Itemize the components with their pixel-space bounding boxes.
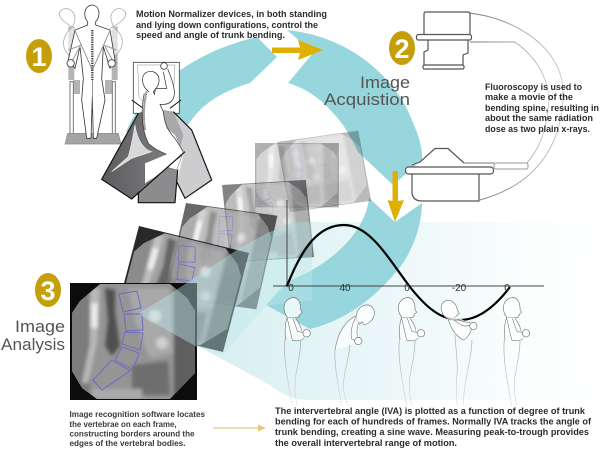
text: motion normalizer: and lying down configurations, control the: [136, 20, 318, 30]
chart: axes and curve: 40: [339, 283, 351, 294]
text: image recognition: Image recognition software locates: [70, 410, 206, 419]
gold arrow: step 1 to 2: [272, 40, 323, 60]
heading: Image Acquistion: Acquistion: [324, 90, 410, 109]
heading: Image Analysis: Analysis: [1, 335, 65, 354]
photo stack: fluoroscopy frames: [66, 131, 371, 400]
text: image recognition: the vertebrae on each frame,: [70, 420, 176, 429]
text: fluoroscopy: dose as two plain x-rays.: [485, 124, 590, 134]
text: image recognition: edges of the vertebral bodies.: [70, 439, 186, 448]
chart: axes and curve: 0: [288, 283, 294, 294]
heading: Image Acquistion: Image: [360, 73, 410, 92]
device: standing motion normalizer: [59, 5, 126, 144]
text: motion normalizer: speed and angle of trunk bending.: [136, 30, 285, 40]
chart: axes and curve: 0: [504, 283, 510, 294]
chart: axes and curve: [273, 200, 544, 320]
figure: leaning back: [441, 300, 477, 406]
figure: standing 1: [284, 298, 310, 406]
figure: bending forward: [335, 305, 374, 406]
heading: Image Acquistion: [324, 73, 410, 109]
heading: Image Analysis: Image: [15, 317, 65, 336]
text: motion normalizer: [136, 9, 327, 40]
text: fluoroscopy: make a movie of the: [485, 92, 573, 102]
heading: Image Analysis: [1, 317, 65, 354]
text: intervertebral angle: The intervertebral angle (IVA) is plotted as a function of degree of trunk: [275, 406, 586, 416]
text: intervertebral angle: [275, 406, 592, 448]
step badge 3: [35, 273, 61, 307]
text: image recognition: [70, 410, 206, 448]
device: lying motion normalizer: [102, 62, 212, 203]
device: fluoroscope C-arm: [406, 12, 563, 201]
text: intervertebral angle: the overall intervertebral range of motion.: [275, 438, 457, 448]
text: fluoroscopy: bending spine, resulting in: [485, 103, 599, 113]
step badge 2: [389, 31, 415, 65]
step badge 1: [26, 39, 52, 73]
text: intervertebral angle: bending for each of hundreds of frames. Normally IVA tracks the angle of: [275, 416, 592, 426]
step badge 3: 3: [40, 276, 56, 306]
step badge 1: 1: [31, 42, 47, 72]
text: intervertebral angle: trunk bending, creating a sine wave. Measuring peak-to-trough provides: [275, 427, 589, 437]
text: motion normalizer: Motion Normalizer devices, in both standing: [136, 9, 327, 19]
text: image recognition: constructing borders around the: [70, 430, 195, 438]
chart: axes and curve: 0: [404, 283, 410, 294]
text: fluoroscopy: [485, 82, 599, 134]
chart: axes and curve: -20: [452, 283, 467, 294]
text: fluoroscopy: Fluoroscopy is used to: [485, 82, 582, 92]
figure: standing 2: [398, 298, 425, 406]
figure: standing 3: [503, 298, 530, 406]
background beam panel: [140, 222, 600, 400]
step badge 2: 2: [394, 34, 410, 64]
text: fluoroscopy: about the same radiation: [485, 113, 593, 123]
small arrow: [213, 424, 266, 432]
gold arrow: step 2 to 3: [388, 171, 404, 222]
beam overlay on frames: [140, 222, 312, 354]
teal cycle arrows: [126, 30, 422, 329]
